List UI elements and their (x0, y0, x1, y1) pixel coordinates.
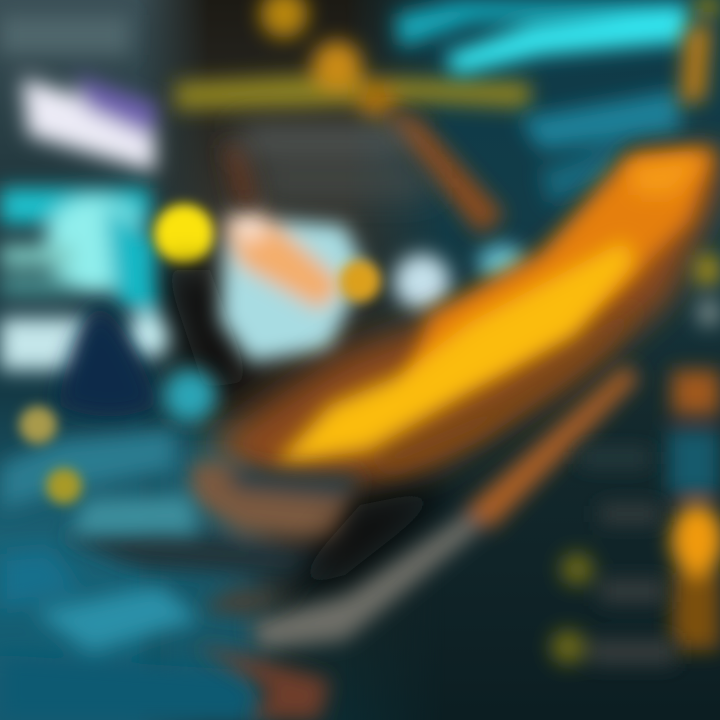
top yellow band and nodes (175, 0, 530, 120)
arrow orange mid layer (400, 150, 715, 405)
right column: amber and teal blocks (668, 255, 720, 650)
yellow circle node (154, 204, 214, 264)
lower left teal tiles (0, 430, 270, 720)
lower left yellow nodes (19, 406, 82, 504)
gold circle node (339, 260, 381, 302)
diagonal brown beam (222, 112, 505, 235)
top right cyan ribbons (395, 2, 690, 205)
pale blue blobs (394, 244, 526, 310)
large orange rising arrow (205, 145, 720, 495)
teal circle node (163, 369, 217, 423)
centre panel: pale blue and orange streak (220, 208, 365, 362)
arrow yellow core (275, 155, 705, 465)
dark shadow under arrow (285, 485, 460, 590)
dark vertical stem (165, 270, 250, 390)
arrow lower brown shadow band (370, 305, 640, 472)
dark blue silhouette (58, 305, 158, 416)
bottom rust strip (195, 645, 330, 720)
lower diagonal grey-orange rail (250, 365, 640, 650)
left panel: cyan stripes (0, 188, 170, 370)
grey centre bars (240, 128, 430, 194)
top right amber post (680, 0, 720, 105)
arrow outer rust body (205, 145, 720, 495)
right lower list markers and lines (551, 450, 675, 664)
top left panel: white and violet glow (0, 15, 158, 172)
steps: brown and dark layered bars (60, 460, 360, 615)
